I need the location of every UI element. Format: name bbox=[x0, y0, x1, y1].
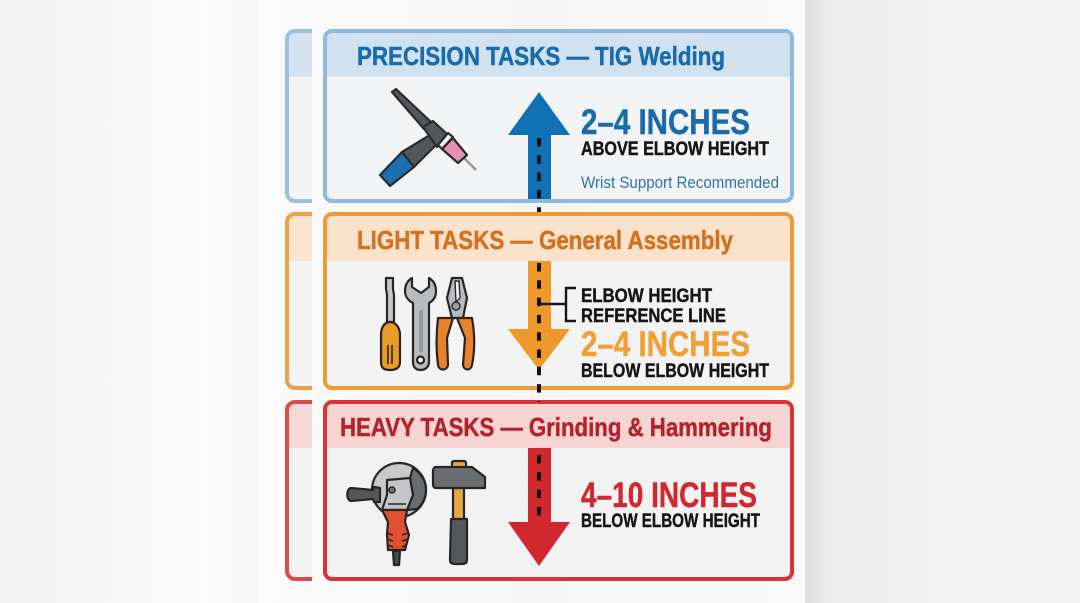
label: above elbow height: ABOVE ELBOW HEIGHT bbox=[581, 138, 769, 160]
value: 4-10 inches below: 4–10 INCHES bbox=[581, 476, 757, 515]
heading: heavy tasks: HEAVY TASKS — Grinding & Hammering bbox=[340, 412, 772, 442]
back tab: heavy bbox=[287, 402, 312, 579]
label: below elbow height heavy: BELOW ELBOW HEIGHT bbox=[581, 510, 760, 532]
icon: hammer bbox=[433, 461, 485, 564]
paper sheet bbox=[258, 0, 805, 603]
elbow height dashed line bbox=[537, 138, 541, 518]
label: below elbow height: BELOW ELBOW HEIGHT bbox=[581, 360, 769, 382]
label: elbow height reference line bbox=[581, 285, 726, 327]
value: 2-4 inches above: 2–4 INCHES bbox=[581, 103, 750, 142]
panel: precision tasks bbox=[287, 31, 792, 201]
back tab: precision bbox=[287, 31, 312, 201]
panel: light tasks bbox=[287, 214, 792, 388]
panel: heavy tasks bbox=[287, 402, 792, 579]
label: elbow height reference line: ELBOW HEIGHT bbox=[581, 285, 712, 307]
panel frame: heavy bbox=[325, 402, 792, 579]
bracket: elbow reference bbox=[539, 288, 576, 321]
heading: precision tasks: PRECISION TASKS — TIG Welding bbox=[357, 41, 725, 71]
icon: wrench bbox=[405, 278, 436, 370]
icon: TIG torch bbox=[380, 89, 476, 186]
icon: angle grinder bbox=[347, 463, 426, 565]
icon: pliers bbox=[436, 278, 474, 370]
arrow: down red bbox=[508, 448, 570, 566]
panel frame: precision bbox=[325, 31, 792, 201]
label: elbow height reference line: REFERENCE LINE bbox=[581, 305, 726, 327]
panel frame: light bbox=[325, 214, 792, 388]
arrow: down orange bbox=[508, 261, 570, 370]
note: wrist support: Wrist Support Recommended bbox=[581, 173, 779, 192]
icon: hand tools bbox=[381, 278, 474, 370]
back tab: light bbox=[287, 214, 312, 388]
icon: screwdriver bbox=[381, 278, 400, 370]
value: 2-4 inches below: 2–4 INCHES bbox=[581, 325, 750, 364]
arrow: up blue bbox=[508, 92, 570, 199]
heading: light tasks: LIGHT TASKS — General Assembly bbox=[357, 225, 733, 255]
